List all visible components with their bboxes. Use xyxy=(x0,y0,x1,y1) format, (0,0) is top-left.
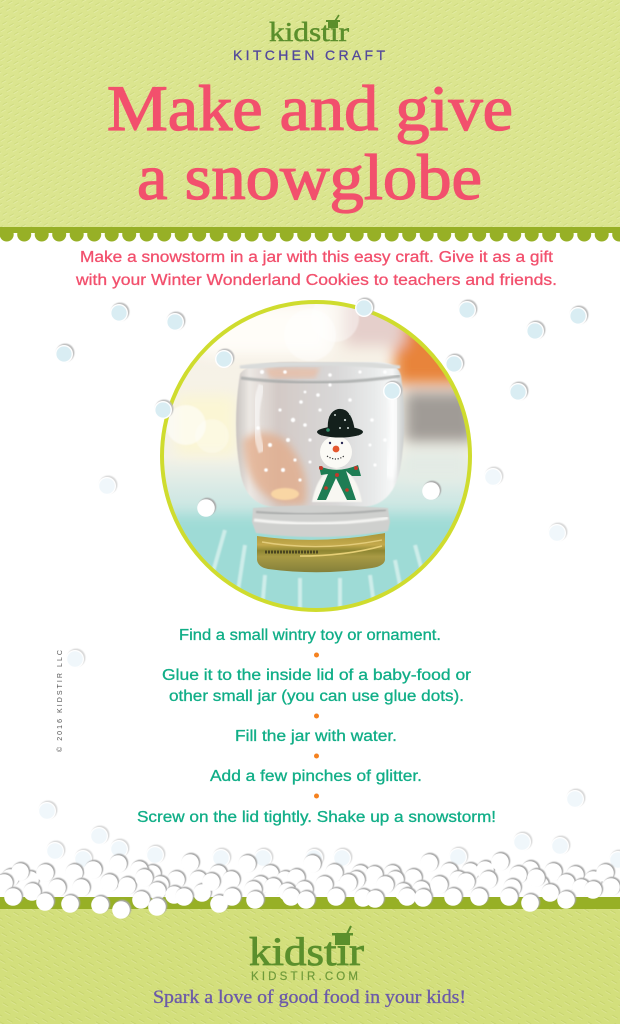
top logo: kidstir xyxy=(269,17,349,47)
step 2: Glue it to the inside lid of a baby-food or xyxy=(162,667,471,684)
title: a snowglobe xyxy=(137,142,482,214)
step 3: Fill the jar with water. xyxy=(235,728,397,745)
falling snowflakes xyxy=(55,298,588,668)
warm reflections xyxy=(243,432,306,505)
cloth stripes xyxy=(212,529,423,608)
gold lid xyxy=(257,533,385,572)
title xyxy=(107,73,513,214)
photo background blurs xyxy=(174,304,468,572)
footer panel xyxy=(0,897,620,1024)
slogan: Spark a love of good food in your kids! xyxy=(153,987,466,1008)
snowman xyxy=(312,409,363,502)
step 4: Add a few pinches of glitter. xyxy=(210,768,422,785)
step 2 xyxy=(162,667,471,705)
intro text: Make a snowstorm in a jar with this easy craft. Give it as a gift xyxy=(80,249,554,266)
top logo: KITCHEN CRAFT xyxy=(233,47,385,63)
photo: snowglobe jar in circular frame xyxy=(160,294,480,615)
step 5: Screw on the lid tightly. Shake up a snowstorm! xyxy=(137,809,496,826)
glitter xyxy=(256,370,387,482)
step separators xyxy=(314,652,319,798)
header panel xyxy=(0,0,620,234)
footer logo: KIDSTIR.COM xyxy=(251,971,358,983)
intro text xyxy=(75,249,557,289)
intro text: with your Winter Wonderland Cookies to teachers and friends. xyxy=(75,272,557,289)
jar xyxy=(236,362,404,572)
jar neck xyxy=(252,506,390,537)
icon: pot and spoon xyxy=(326,15,340,28)
snow pile xyxy=(0,789,620,919)
jar body xyxy=(236,362,404,507)
step 2: other small jar (you can use glue dots). xyxy=(169,688,464,705)
footer logo: kidstir xyxy=(249,929,364,974)
icon: pot and spoon xyxy=(332,926,353,945)
scalloped border xyxy=(0,227,620,234)
craft steps xyxy=(137,627,496,826)
copyright note: © 2016 KIDSTIR LLC xyxy=(56,650,64,752)
title: Make and give xyxy=(107,73,513,145)
frame ring xyxy=(162,302,470,610)
top logo xyxy=(233,15,385,63)
step 1: Find a small wintry toy or ornament. xyxy=(179,627,441,644)
